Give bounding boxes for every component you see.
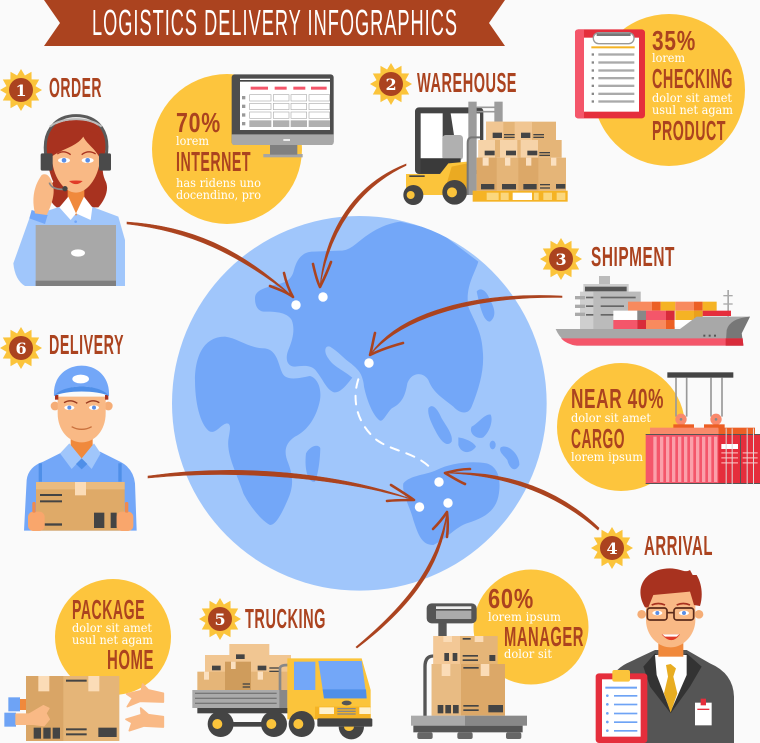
pallet — [473, 191, 568, 202]
step 4 badge — [591, 527, 633, 569]
icon: monitor — [232, 74, 334, 157]
step 1 badge — [0, 69, 42, 111]
illustration: manager with clipboard — [596, 568, 734, 743]
panel: package home callout: HOME — [107, 644, 154, 675]
panel: internet callout: lorem — [176, 133, 209, 148]
illustration: cargo container on crane — [646, 372, 760, 484]
truck bed — [192, 690, 287, 708]
illustration: forklift with boxes — [403, 102, 568, 205]
illustration: delivery man — [24, 366, 137, 531]
panel: manager callout: dolor sit — [504, 646, 552, 661]
hair — [45, 120, 107, 207]
illustration: package handover — [4, 676, 163, 741]
illustration: call centre operator — [13, 116, 125, 286]
step 6 label: DELIVERY — [49, 329, 124, 360]
hands — [28, 512, 45, 531]
arrow: delivery to globe — [148, 470, 414, 501]
step 3 badge: 3 — [555, 250, 567, 269]
panel: checking product callout — [593, 14, 745, 166]
head — [51, 402, 59, 410]
step 5 badge — [199, 598, 241, 640]
wheels — [208, 711, 234, 737]
panel: package home callout: usul net agam — [72, 632, 153, 647]
containers — [628, 302, 652, 311]
step 1 label: ORDER — [49, 72, 102, 103]
truck cab — [287, 658, 371, 719]
panel: cargo callout: CARGO — [571, 423, 625, 454]
arrow: order to globe — [127, 222, 293, 297]
step 5 label: TRUCKING — [245, 603, 326, 634]
laptop — [36, 225, 116, 286]
panel: manager callout: 60% — [488, 583, 534, 614]
panel: internet callout: INTERNET — [176, 146, 251, 177]
panel: cargo callout — [557, 363, 685, 491]
face — [52, 132, 100, 193]
arrow: arrival to globe — [445, 469, 599, 530]
step 2 label: WAREHOUSE — [417, 67, 517, 98]
illustration: delivery truck — [192, 644, 372, 739]
step 2 badge: 2 — [385, 75, 397, 94]
step 2 badge — [370, 63, 412, 105]
left hand on box — [16, 706, 49, 726]
parcel — [36, 482, 125, 531]
panel: checking product callout: usul net agam — [652, 102, 733, 117]
globe — [172, 216, 547, 591]
head — [637, 610, 646, 619]
suit — [607, 650, 734, 743]
panel: internet callout: 70% — [176, 107, 221, 138]
step 3 label: SHIPMENT — [591, 241, 675, 272]
location dots — [291, 292, 453, 512]
panel: manager callout: MANAGER — [504, 621, 584, 652]
clipboard — [596, 673, 647, 743]
hull — [556, 317, 750, 346]
panel: cargo callout: NEAR 40% — [571, 383, 664, 414]
panel: internet callout: has ridens uno — [176, 175, 261, 190]
panel: package home callout: PACKAGE — [72, 594, 145, 625]
panel: checking product callout: lorem — [652, 50, 685, 65]
arrow: shipment to globe — [370, 295, 562, 355]
panel: manager callout — [474, 570, 588, 684]
headset — [45, 116, 107, 157]
arrow: trucking to globe — [356, 512, 448, 648]
badge — [695, 703, 712, 725]
step 5 badge: 5 — [214, 610, 226, 629]
step 3 badge — [540, 238, 582, 280]
title banner — [44, 0, 505, 46]
receiving hand lower — [126, 708, 163, 731]
step 6 badge — [0, 327, 42, 369]
dashed route — [356, 379, 430, 467]
step 4 badge: 4 — [606, 539, 618, 558]
illustration: container ship — [556, 276, 750, 346]
panel: checking product callout: dolor sit amet — [652, 90, 732, 105]
arrow: warehouse to globe — [313, 164, 406, 287]
panel: internet callout — [152, 74, 302, 224]
truck cargo boxes — [229, 644, 269, 664]
panel: package home callout: dolor sit amet — [72, 620, 152, 635]
panel: cargo callout: dolor sit amet — [571, 410, 651, 425]
panel: manager callout: lorem ipsum — [488, 609, 561, 624]
icon: clipboard checklist — [575, 29, 645, 118]
panel: package home callout — [55, 579, 171, 695]
panel: internet callout: docendino, pro — [176, 187, 261, 202]
panel: checking product callout: 35% — [652, 25, 696, 56]
hand and mic — [33, 174, 54, 215]
step 1 badge: 1 — [15, 81, 27, 100]
step 6 badge: 6 — [15, 339, 27, 358]
operator body — [13, 207, 125, 286]
stacked boxes — [486, 122, 556, 140]
receiving hand upper — [127, 684, 163, 707]
panel: cargo callout: lorem ipsum — [571, 449, 643, 464]
cap — [54, 366, 109, 396]
illustration: parcel scale — [411, 603, 527, 739]
